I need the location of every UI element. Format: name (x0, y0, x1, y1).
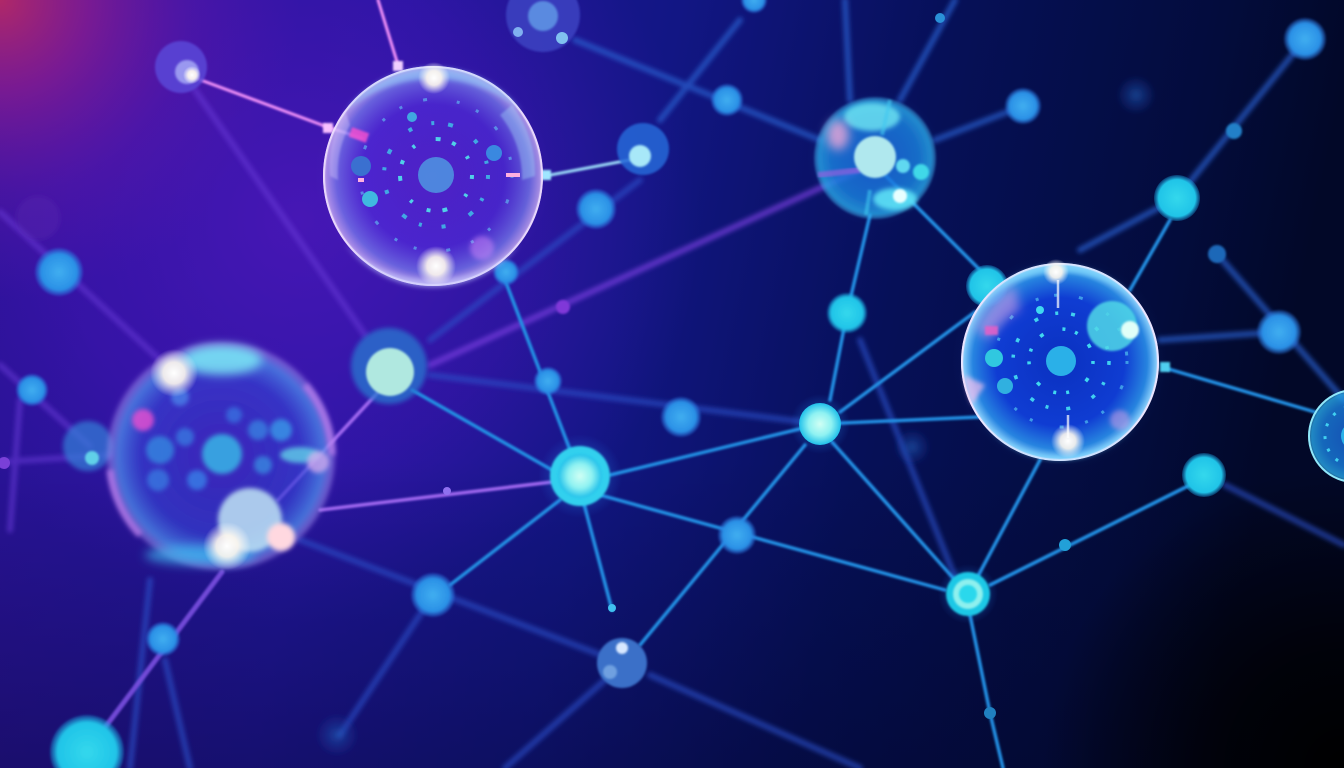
bubble node: top centre (506, 0, 580, 52)
glass sphere: right (952, 254, 1168, 470)
glass sphere: lower left (97, 332, 345, 580)
purple network lines (278, 388, 552, 510)
pink upper-left connectors (190, 0, 398, 138)
hub node: lower right ring (938, 564, 998, 624)
hub node: centre (538, 434, 622, 518)
bubble node: far left (63, 421, 113, 471)
blue network lines (412, 175, 1315, 768)
bright junction nodes (538, 394, 998, 624)
hub node: middle right (790, 394, 850, 454)
bubble node: centre left (351, 328, 427, 404)
dim out-of-focus nodes (16, 77, 1154, 755)
glass sphere: right edge (1308, 389, 1344, 483)
bubble node: right of main sphere (617, 123, 669, 175)
glass sphere: upper left (315, 58, 551, 294)
light-blue connector (545, 158, 640, 176)
bubble node: top left (155, 41, 207, 93)
lower-left purple line (103, 572, 222, 730)
bubble node: bottom centre (597, 638, 647, 688)
cyan nodes (50, 175, 1226, 768)
small bubble nodes (63, 0, 669, 688)
glass sphere: top right (807, 90, 943, 226)
